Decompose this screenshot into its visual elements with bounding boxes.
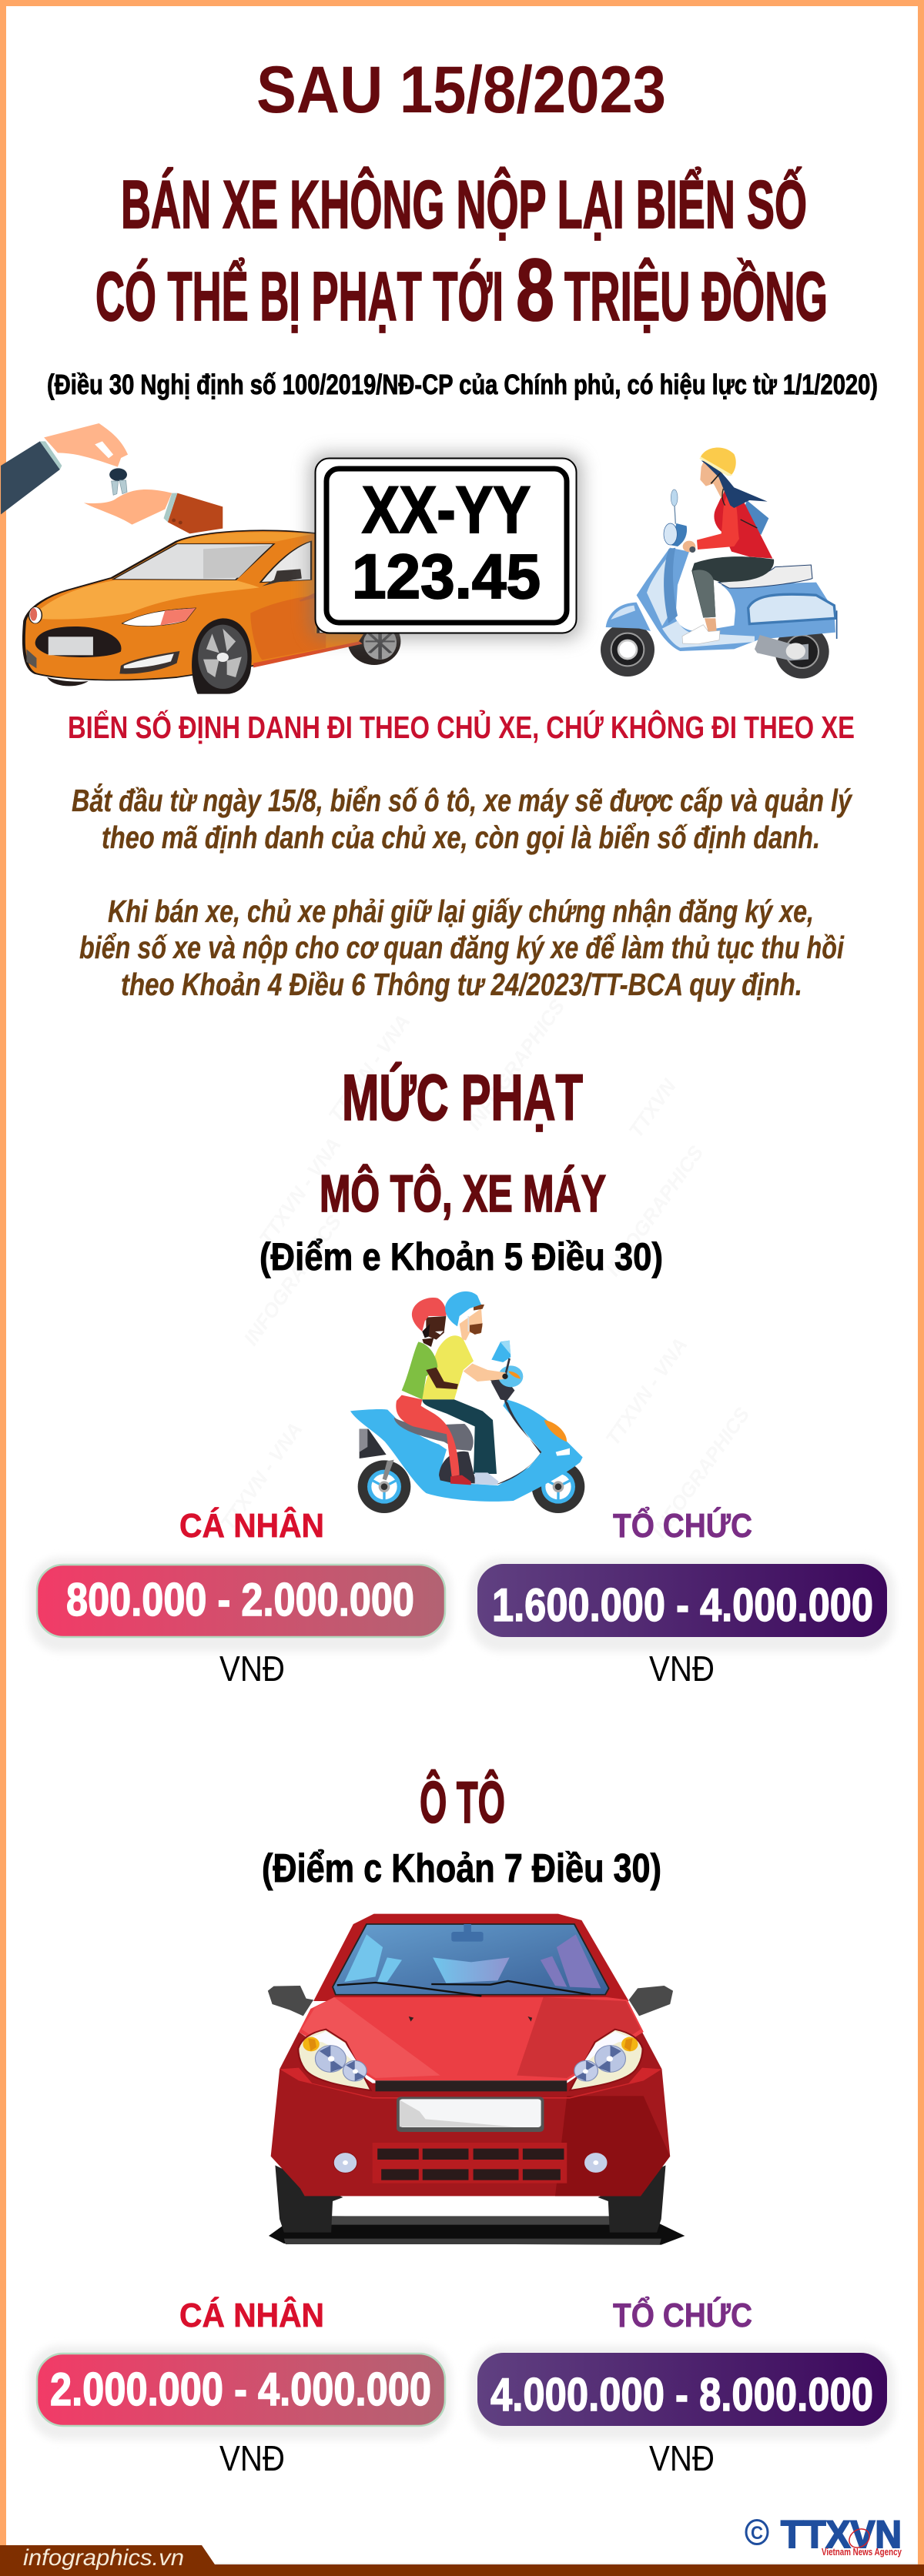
headline figure 8: 8 bbox=[516, 242, 554, 339]
label: individual: CÁ NHÂN bbox=[179, 1506, 324, 1545]
currency: VNĐ bbox=[219, 1649, 285, 1689]
title: date: SAU 15/8/2023 bbox=[256, 53, 666, 127]
heading: cars: Ô TÔ bbox=[420, 1770, 505, 1836]
text: INFOGRAPHICS bbox=[647, 1402, 755, 1542]
icon: orange car bbox=[24, 530, 400, 694]
heading: motorbikes: MÔ TÔ, XE MÁY bbox=[320, 1164, 606, 1223]
text: TTXVN bbox=[624, 1074, 681, 1141]
footer bar with site name: infographics.vn bbox=[23, 2545, 184, 2571]
label: organisation: TỔ CHỨC bbox=[613, 2295, 752, 2334]
label: individual: CÁ NHÂN bbox=[179, 2296, 324, 2334]
car legal reference: (Điểm c Khoản 7 Điều 30) bbox=[262, 1846, 661, 1891]
icon: red car front view bbox=[268, 1914, 685, 2245]
panel: car organisation fine bbox=[470, 2295, 895, 2478]
footer bar with site name bbox=[0, 2545, 924, 2576]
plate line 2: 123.45 bbox=[352, 542, 541, 612]
logo: TTXVN: TTXVN bbox=[781, 2513, 902, 2556]
fine pill bbox=[37, 1565, 445, 1637]
panel: car individual fine bbox=[29, 2296, 451, 2478]
fine pill bbox=[37, 2354, 445, 2426]
text: TTXVN - VNA bbox=[323, 1011, 415, 1126]
panel: motorbike organisation fine bbox=[470, 1505, 895, 1689]
headline line 2 start: CÓ THỂ BỊ PHẠT TỚI bbox=[95, 257, 504, 336]
text: INFOGRAPHICS bbox=[601, 1141, 708, 1280]
plate line 1: XX-YY bbox=[362, 473, 531, 547]
title: headline bbox=[95, 166, 828, 339]
fine pill bbox=[477, 2353, 887, 2426]
fine amount: 800.000 - 2.000.000 bbox=[66, 1574, 414, 1625]
icon: hands passing car keys bbox=[1, 423, 223, 533]
heading: fines: MỨC PHẠT bbox=[342, 1061, 583, 1134]
text block: definition bbox=[72, 783, 853, 855]
fine amount: 2.000.000 - 4.000.000 bbox=[50, 2364, 431, 2415]
icon: woman riding blue scooter bbox=[601, 448, 837, 679]
currency: VNĐ bbox=[649, 1649, 715, 1689]
panel: motorbike individual fine bbox=[29, 1506, 451, 1689]
text: TTXVN - VNA bbox=[216, 1418, 307, 1534]
logo: TTXVN: C bbox=[751, 2523, 763, 2544]
currency: VNĐ bbox=[649, 2438, 715, 2478]
text block: procedure when selling bbox=[79, 894, 845, 1002]
fine pill bbox=[477, 1564, 887, 1637]
text: INFOGRAPHICS bbox=[239, 1210, 346, 1349]
icon: couple on blue motorbike bbox=[350, 1291, 584, 1513]
text: TTXVN - VNA bbox=[601, 1334, 692, 1449]
motorbike legal reference: (Điểm e Khoản 5 Điều 30) bbox=[259, 1235, 663, 1278]
label: organisation: TỔ CHỨC bbox=[613, 1505, 752, 1545]
text: INFOGRAPHICS bbox=[462, 994, 570, 1134]
license plate bbox=[310, 454, 581, 639]
currency: VNĐ bbox=[219, 2438, 285, 2478]
text: TTXVN - VNA bbox=[254, 1134, 346, 1249]
